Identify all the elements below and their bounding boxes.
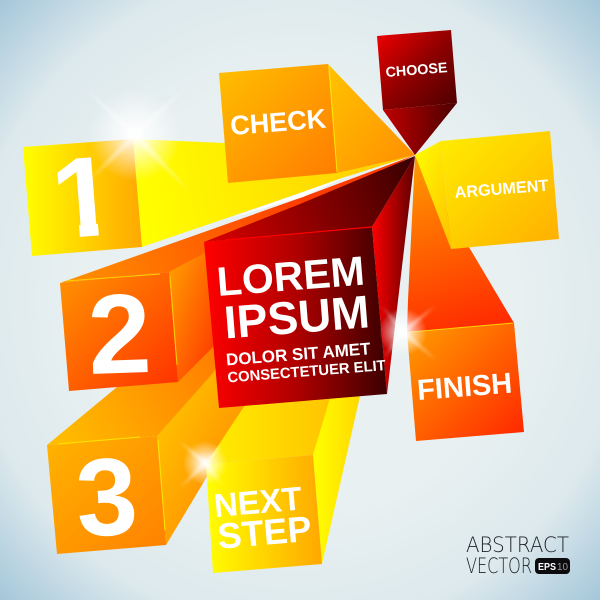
- white gap highlight: [233, 177, 345, 217]
- central right face: [372, 156, 415, 394]
- vector text: VECTOR: [466, 554, 532, 578]
- flare: top left: [85, 88, 190, 192]
- central heading: CONSECTETUER ELIT: [227, 358, 386, 386]
- block finish: [407, 156, 524, 441]
- next step label: [212, 479, 313, 557]
- next step top face: [206, 398, 332, 464]
- next step front face: [206, 455, 322, 573]
- caption: abstract vector: [466, 533, 570, 578]
- block 3 front face: [47, 436, 166, 554]
- argument front face: [441, 131, 559, 249]
- central heading: [215, 246, 386, 387]
- block 3 side face: [157, 340, 262, 545]
- block 2: [60, 155, 415, 398]
- finish side face: [407, 156, 514, 332]
- central heading: DOLOR SIT AMET: [225, 339, 372, 370]
- check edge highlight: [329, 66, 337, 172]
- block 3: [47, 340, 262, 560]
- finish label: FINISH: [416, 368, 513, 407]
- block 1 front face: [23, 139, 142, 256]
- glare flares: [85, 88, 436, 488]
- block 2 top face: [60, 155, 415, 283]
- next step right face: [313, 396, 360, 564]
- number 3: 3: [73, 434, 140, 560]
- next step label: NEXT: [212, 480, 303, 524]
- central front face: [204, 227, 387, 408]
- choose label: CHOOSE: [385, 60, 448, 81]
- block 1: [23, 139, 415, 256]
- block 2 side face: [169, 250, 215, 382]
- next step label: STEP: [216, 508, 313, 557]
- check front face: [219, 64, 337, 183]
- abstract text: ABSTRACT: [466, 533, 569, 557]
- central block: [204, 156, 415, 408]
- check label: CHECK: [229, 104, 328, 141]
- block 3 edge highlights: [58, 437, 165, 530]
- eps badge: 10: [557, 562, 568, 573]
- eps badge: [535, 558, 570, 574]
- block 3 top face: [47, 340, 220, 445]
- central edge highlight: [225, 227, 372, 240]
- flare: lower left: [180, 441, 227, 488]
- choose front face: [377, 30, 457, 110]
- central heading: LOREM: [215, 247, 366, 305]
- central top face: [204, 156, 415, 242]
- flare: right: [379, 306, 436, 360]
- argument side face: [415, 141, 451, 249]
- finish edge highlight: [410, 323, 513, 332]
- block argument: [415, 131, 559, 249]
- block next step: [206, 396, 360, 573]
- block 1 side face: [133, 139, 415, 247]
- argument label: ARGUMENT: [454, 177, 549, 202]
- block 2 front face: [60, 272, 178, 391]
- choose lower face: [383, 103, 457, 155]
- finish front face: [407, 323, 524, 441]
- number 1: 1: [47, 132, 120, 264]
- block check: [219, 64, 415, 183]
- block 2 edge highlights: [66, 274, 177, 365]
- central heading: IPSUM: [222, 285, 371, 349]
- check side face: [328, 64, 415, 173]
- eps badge: EPS: [538, 561, 556, 573]
- block choose: [377, 30, 457, 155]
- number 2: 2: [86, 270, 153, 398]
